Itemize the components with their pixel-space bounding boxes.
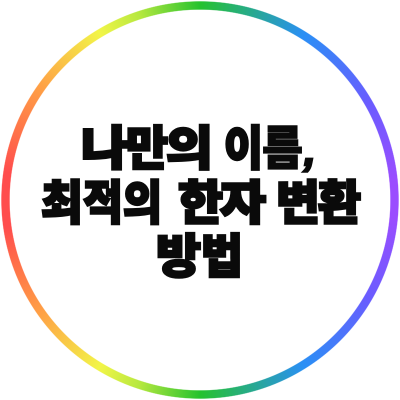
title line 1: 나 <box>81 122 128 175</box>
title line 1: 이 <box>224 122 263 175</box>
title line 2: 최 <box>41 176 83 230</box>
title line 1: , <box>303 127 316 174</box>
title line 2: 자 <box>220 176 266 230</box>
title line 1 <box>81 122 316 175</box>
title line 2: 의 <box>123 176 162 230</box>
title line 3: 법 <box>201 230 243 283</box>
title line 2: 적 <box>83 176 123 230</box>
title line 2 <box>41 176 361 230</box>
title line 2: 환 <box>318 176 361 230</box>
title line 1: 만 <box>126 122 168 175</box>
title line 2: 변 <box>276 176 320 230</box>
title line 1: 름 <box>262 122 303 175</box>
title line 1: 의 <box>166 122 213 175</box>
title line 3: 방 <box>156 230 201 283</box>
title line 2: 한 <box>178 176 223 230</box>
title line 3 <box>156 230 243 283</box>
